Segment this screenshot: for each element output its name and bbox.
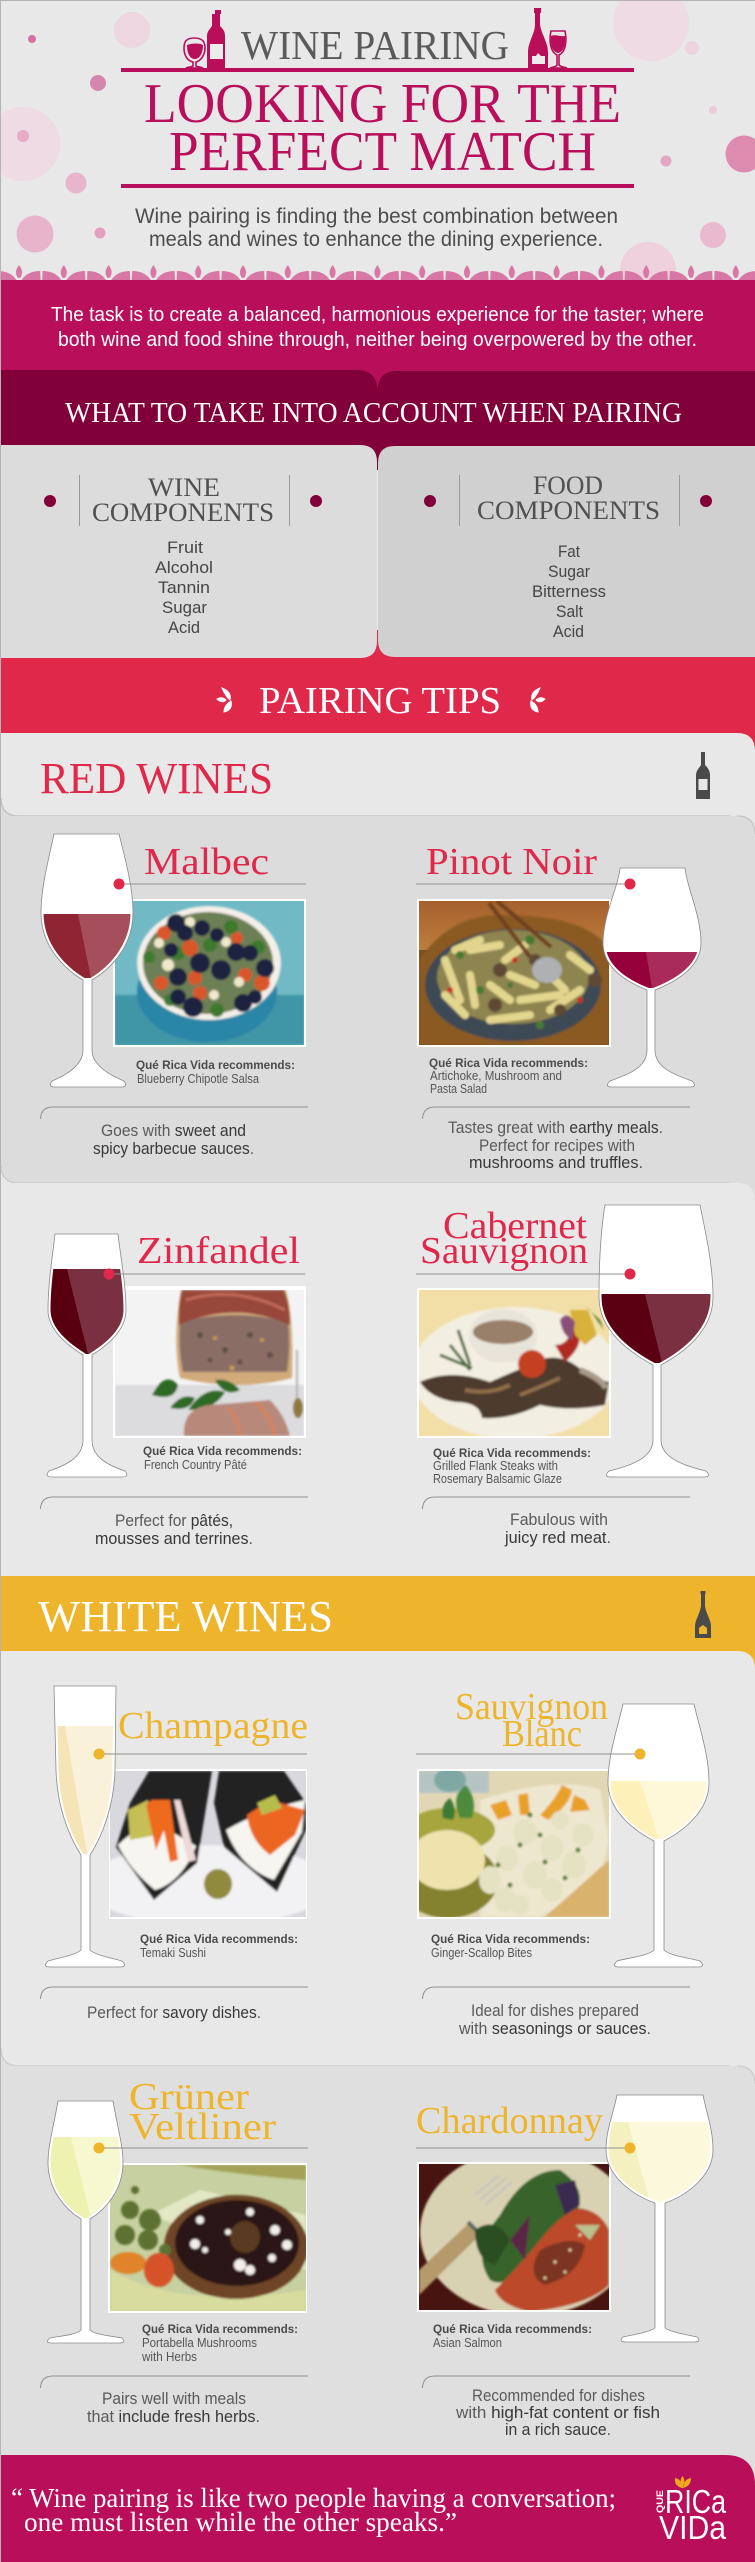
curved rule [422,2376,690,2388]
recommendation: Qué Rica Vida recommends: [431,1932,590,1946]
quote text: one must listen while the other speaks.” [24,2507,457,2537]
recommendation [429,1056,588,1096]
card: gruner veltliner [40,2076,308,2426]
recommendation: Qué Rica Vida recommends: [143,1444,302,1458]
pairing note: juicy red meat. [504,1528,611,1547]
pointer dot [94,2142,104,2154]
pointer line [99,1753,307,1755]
pointer dot [624,2142,636,2154]
pairing note: Recommended for dishes [472,2386,645,2405]
component list: Bitterness [532,582,606,601]
pairing note: mousses and terrines. [95,1529,253,1548]
task text: both wine and food shine through, neither being overpowered by the other. [58,328,697,351]
component list: Alcohol [155,558,213,577]
task text [51,303,704,351]
icon: bottle [696,752,710,799]
heading: RED WINES [40,754,273,803]
intro text: Wine pairing is finding the best combination between [135,205,618,228]
logo: que rica vida [655,2476,727,2546]
icon: wine bottle and glass right [528,8,567,68]
pairing note [455,2386,660,2439]
logo: que rica vida: RICa [665,2483,727,2520]
pointer line [416,1273,630,1275]
recommendation [433,2322,592,2350]
quote text: “ Wine pairing is like two people having a conversation; [11,2483,616,2513]
task text: The task is to create a balanced, harmonious experience for the taster; where [51,303,704,326]
pairing note: spicy barbecue sauces. [93,1139,254,1158]
curved rule [40,2376,308,2388]
card: champagne [40,1686,333,2022]
pointer line [416,1753,640,1755]
icon: leaf right [531,688,545,712]
heading: WINE [148,473,220,502]
card: malbec [38,834,308,1158]
pointer dot [634,1748,646,1760]
glass: sauvignon blanc [604,1704,714,1967]
panel: zinfandel and cabernet background [1,1178,755,1576]
curved rule [40,1987,308,1999]
recommendation: Qué Rica Vida recommends: [142,2322,298,2336]
pointer dot [94,1748,104,1760]
pointer line [416,883,630,885]
component list: Fat [558,542,580,561]
icon: bottle [695,1591,711,1638]
title: PERFECT MATCH [169,121,596,183]
pairing note: Goes with sweet and [101,1121,246,1140]
quote text [11,2483,616,2537]
icon: wine glass and bottle left [184,10,225,68]
recommendation: Ginger-Scallop Bites [431,1946,532,1960]
wine name: Malbec [144,841,269,883]
pointer dot [104,1268,114,1280]
pairing note: Fabulous with [510,1510,608,1529]
recommendation [141,2322,298,2364]
recommendation: Temaki Sushi [140,1946,206,1960]
panel: footer quote [0,2450,755,2562]
recommendation: Rosemary Balsamic Glaze [433,1472,562,1486]
component list: Acid [168,618,200,637]
pairing note: Ideal for dishes prepared [471,2001,639,2020]
card: cabernet sauvignon [411,1205,720,1547]
pairing note: mushrooms and truffles. [469,1153,643,1172]
heading [477,471,660,525]
pointer line [109,1273,305,1275]
glass: gruner veltliner [44,2101,128,2343]
band: white wines [0,1576,755,1676]
component list [155,538,213,637]
divider [80,475,290,526]
card: pinot noir [416,841,705,1172]
panel: wine components [1,445,377,658]
pointer dot [624,1268,636,1280]
recommendation: Qué Rica Vida recommends: [429,1056,588,1070]
heading: wine pairing: WINE PAIRING [241,22,509,68]
dot [44,495,56,507]
panel: task statement [0,280,755,395]
wine name: Champagne [118,1705,308,1747]
component list: Sugar [162,598,207,617]
wine name [420,1205,588,1272]
card: zinfandel [40,1230,308,1548]
rule above title [121,68,634,72]
component list: Salt [556,602,583,621]
curved rule [40,1107,308,1119]
panel: malbec and pinot noir background [0,810,755,1190]
wine name: Sauvignon [455,1686,608,1728]
curved rule [422,1107,690,1119]
glass: pinot noir [600,868,705,1087]
intro text: meals and wines to enhance the dining experience. [149,228,603,251]
component list: Acid [553,622,584,641]
icon: leaf left [217,688,231,712]
pairing note [458,2001,651,2038]
photo: asian salmon [417,2148,636,2316]
photo: grilled flank steaks [411,1288,619,1439]
recommendation [433,1446,591,1486]
logo: que rica vida: QUE [655,2490,665,2513]
pairing note: Perfect for savory dishes. [87,2003,261,2022]
curved rule [422,1497,690,1509]
recommendation: Pasta Salad [430,1082,487,1096]
recommendation: Qué Rica Vida recommends: [140,1932,298,1946]
component list: Fruit [167,538,203,557]
component list: Sugar [548,562,590,581]
wine name: Zinfandel [137,1230,300,1272]
pointer line [416,2147,630,2149]
heading: WHITE WINES [38,1592,333,1641]
wine name: Grüner [129,2076,249,2118]
leaf border [0,264,755,280]
wine name: Chardonnay [416,2100,603,2142]
photo: temaki sushi [83,1769,333,1925]
glass: zinfandel [45,1234,130,1477]
photo: ginger scallop bites [398,1768,611,1919]
panel: gruner and chardonnay background [1,2060,755,2456]
component list: Tannin [158,578,210,597]
recommendation: Blueberry Chipotle Salsa [137,1072,259,1086]
panel: what to take into account [0,370,755,470]
wine name: Pinot Noir [426,841,597,883]
recommendation: Grilled Flank Steaks with [433,1459,558,1473]
crimson band: pairing tips [0,630,755,750]
dot [310,495,322,507]
photo: blueberry chipotle salsa [113,899,306,1047]
pairing note: with seasonings or sauces. [458,2019,651,2038]
title: LOOKING FOR THE [144,73,621,135]
recommendation: with Herbs [141,2350,197,2364]
component list [532,542,606,641]
recommendation [136,1058,295,1086]
heading: COMPONENTS [477,496,660,525]
curved rule [422,1987,690,1999]
recommendation: Qué Rica Vida recommends: [433,2322,592,2336]
divider [460,475,680,526]
rule below title [121,184,634,188]
glass: malbec [38,834,138,1087]
pairing note: that include fresh herbs. [87,2407,260,2426]
pointer dot [114,878,124,890]
panel: header [0,0,755,298]
heading [92,473,274,527]
pairing note [95,1511,253,1548]
card: chardonnay [416,2095,717,2439]
wine name: Sauvignon [420,1230,588,1272]
dot [700,495,712,507]
photo: portabella mushrooms [108,2163,308,2313]
recommendation: Qué Rica Vida recommends: [136,1058,295,1072]
pairing note: Pairs well with meals [102,2389,246,2408]
pairing note: Perfect for recipes with [479,1136,635,1155]
pairing note [448,1118,663,1172]
recommendation [143,1444,302,1472]
recommendation: Artichoke, Mushroom and [430,1069,562,1083]
glass: champagne [45,1686,125,1967]
heading: WHAT TO TAKE INTO ACCOUNT WHEN PAIRING [65,397,682,429]
pointer dot [624,878,636,890]
intro text [135,205,618,251]
title [144,73,621,183]
wine name [455,1686,608,1755]
pointer line [119,883,306,885]
pairing note: Tastes great with earthy meals. [448,1118,663,1137]
glass: chardonnay [602,2095,717,2342]
pairing note [504,1510,611,1547]
pairing note: in a rich sauce. [505,2420,611,2439]
recommendation: Portabella Mushrooms [142,2336,257,2350]
photo: french country pate [113,1286,306,1438]
photo: artichoke mushroom pasta salad [417,899,611,1047]
recommendation [431,1932,590,1960]
heading: COMPONENTS [92,498,274,527]
wine name [129,2076,276,2148]
wine name: Veltliner [129,2106,276,2148]
pairing note [87,2389,260,2426]
pairing note [93,1121,254,1158]
pointer line [99,2147,308,2149]
card: sauvignon blanc [398,1686,714,2038]
recommendation [140,1932,298,1960]
dot [424,495,436,507]
header bubbles [0,0,755,298]
pairing note: with high-fat content or fish [455,2403,660,2422]
panel: food components [378,446,755,657]
pairing note: Perfect for pâtés, [115,1511,233,1530]
wine name: Blanc [502,1713,582,1755]
recommendation: French Country Pâté [144,1458,247,1472]
recommendation: Asian Salmon [433,2336,502,2350]
wine name: Cabernet [443,1205,587,1247]
glass: cabernet sauvignon [595,1205,720,1477]
heading: PAIRING TIPS [259,680,501,722]
logo: que rica vida: VIDa [659,2509,727,2546]
heading: FOOD [533,471,603,500]
panel: red wines background [0,733,755,825]
panel: champagne and sauvignon blanc background [0,1651,755,2075]
curved rule [40,1497,308,1509]
recommendation: Qué Rica Vida recommends: [433,1446,591,1460]
